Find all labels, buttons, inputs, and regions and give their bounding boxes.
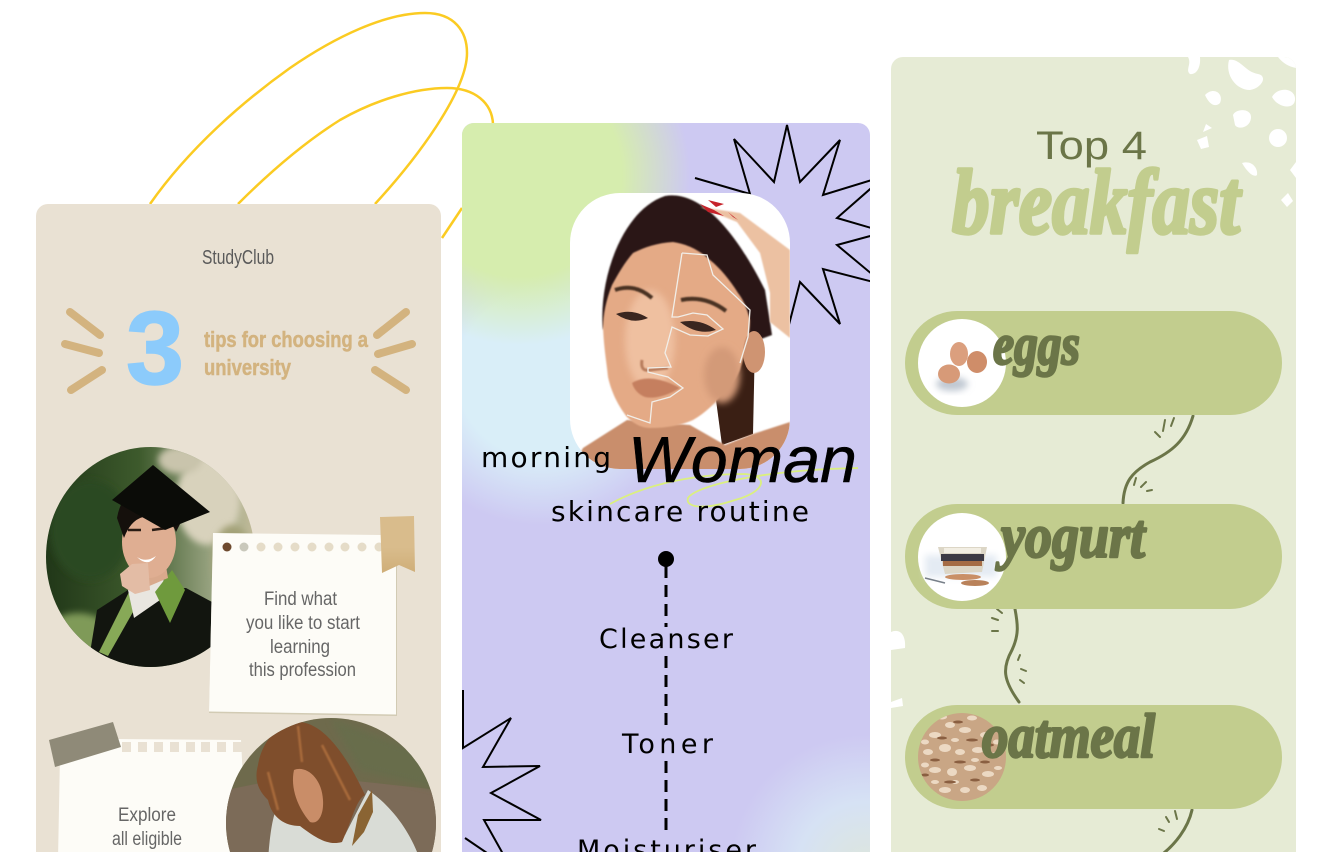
note text [112, 805, 182, 850]
brows [615, 288, 726, 311]
hand [120, 563, 150, 594]
eyes [616, 312, 716, 332]
nails [700, 200, 738, 220]
face [603, 242, 750, 428]
label: oatmeal [982, 703, 1156, 771]
note: find what you like [209, 533, 397, 716]
shoulders [581, 419, 790, 469]
note holes [222, 542, 384, 552]
icon: left rays [65, 312, 102, 390]
icon: right rays [375, 312, 412, 390]
item: yogurt [905, 503, 1282, 609]
heading: tips for choosing a university [204, 327, 369, 380]
item: oatmeal [905, 703, 1282, 809]
brand name: StudyClub [202, 247, 274, 269]
lips [632, 379, 680, 398]
right stole [155, 570, 185, 623]
panel: morning skincare routine [462, 123, 885, 852]
eyes [128, 528, 167, 530]
nose shadow [642, 360, 668, 370]
icon: starburst top right [694, 124, 870, 325]
item: eggs [905, 311, 1282, 415]
sweater [268, 790, 420, 852]
hand [700, 207, 790, 338]
egg photo [936, 342, 987, 391]
mortarboard [112, 465, 210, 530]
left stole [99, 592, 133, 656]
timeline dot [658, 551, 674, 567]
heading: Top 4: Top 4 [1036, 124, 1147, 168]
neck and face [149, 570, 168, 586]
face line art [627, 253, 750, 423]
note text [246, 589, 361, 681]
step: Toner: Toner [621, 729, 714, 760]
panel: top 4 breakfast [891, 57, 1296, 852]
timeline dashes [664, 566, 668, 830]
connectors and ticks [992, 416, 1193, 852]
note text: Explore [118, 805, 176, 826]
yogurt photo [925, 547, 997, 586]
note text: learning [270, 637, 330, 658]
step: Cleanser: Cleanser [599, 624, 734, 655]
icon: starburst bottom left [463, 690, 541, 852]
hair [256, 722, 365, 843]
smile [137, 556, 156, 562]
note: explore [58, 739, 250, 852]
collar [352, 790, 373, 846]
panel: university tips [36, 204, 441, 852]
label: yogurt [995, 503, 1147, 571]
photo: woman with auburn hair [220, 715, 440, 852]
note square perforations [122, 742, 242, 752]
heading: breakfast: breakfast [952, 151, 1242, 253]
heading: tips for choosing a university: tips for choosing a [204, 327, 369, 352]
ear [743, 331, 765, 373]
decorative yellow tilted ellipses [150, 13, 493, 238]
tape: tan [380, 516, 415, 573]
label: morning: morning [481, 441, 611, 474]
label: Woman: Woman [628, 423, 857, 496]
ponytail [716, 356, 754, 445]
note text: you like to start [246, 613, 361, 634]
shirt [128, 580, 164, 618]
note text: Find what [264, 589, 338, 610]
hair [602, 195, 772, 345]
gown [88, 588, 214, 670]
photo: graduate [46, 447, 252, 667]
hair strands [268, 726, 350, 810]
oatmeal photo [915, 710, 1010, 805]
note text: all eligible [112, 829, 182, 850]
note text: this profession [249, 660, 356, 681]
heading: tips for choosing a university: university [204, 355, 292, 380]
number 3: 3 [126, 291, 184, 407]
hair [117, 505, 180, 538]
tape: grey [49, 722, 121, 767]
label: eggs [993, 312, 1080, 377]
label: skincare routine: skincare routine [551, 495, 809, 528]
decorative eggshell flecks [891, 57, 1296, 708]
squiggle accent [610, 468, 858, 507]
face [293, 769, 323, 823]
photo: woman with face line art [570, 193, 790, 475]
